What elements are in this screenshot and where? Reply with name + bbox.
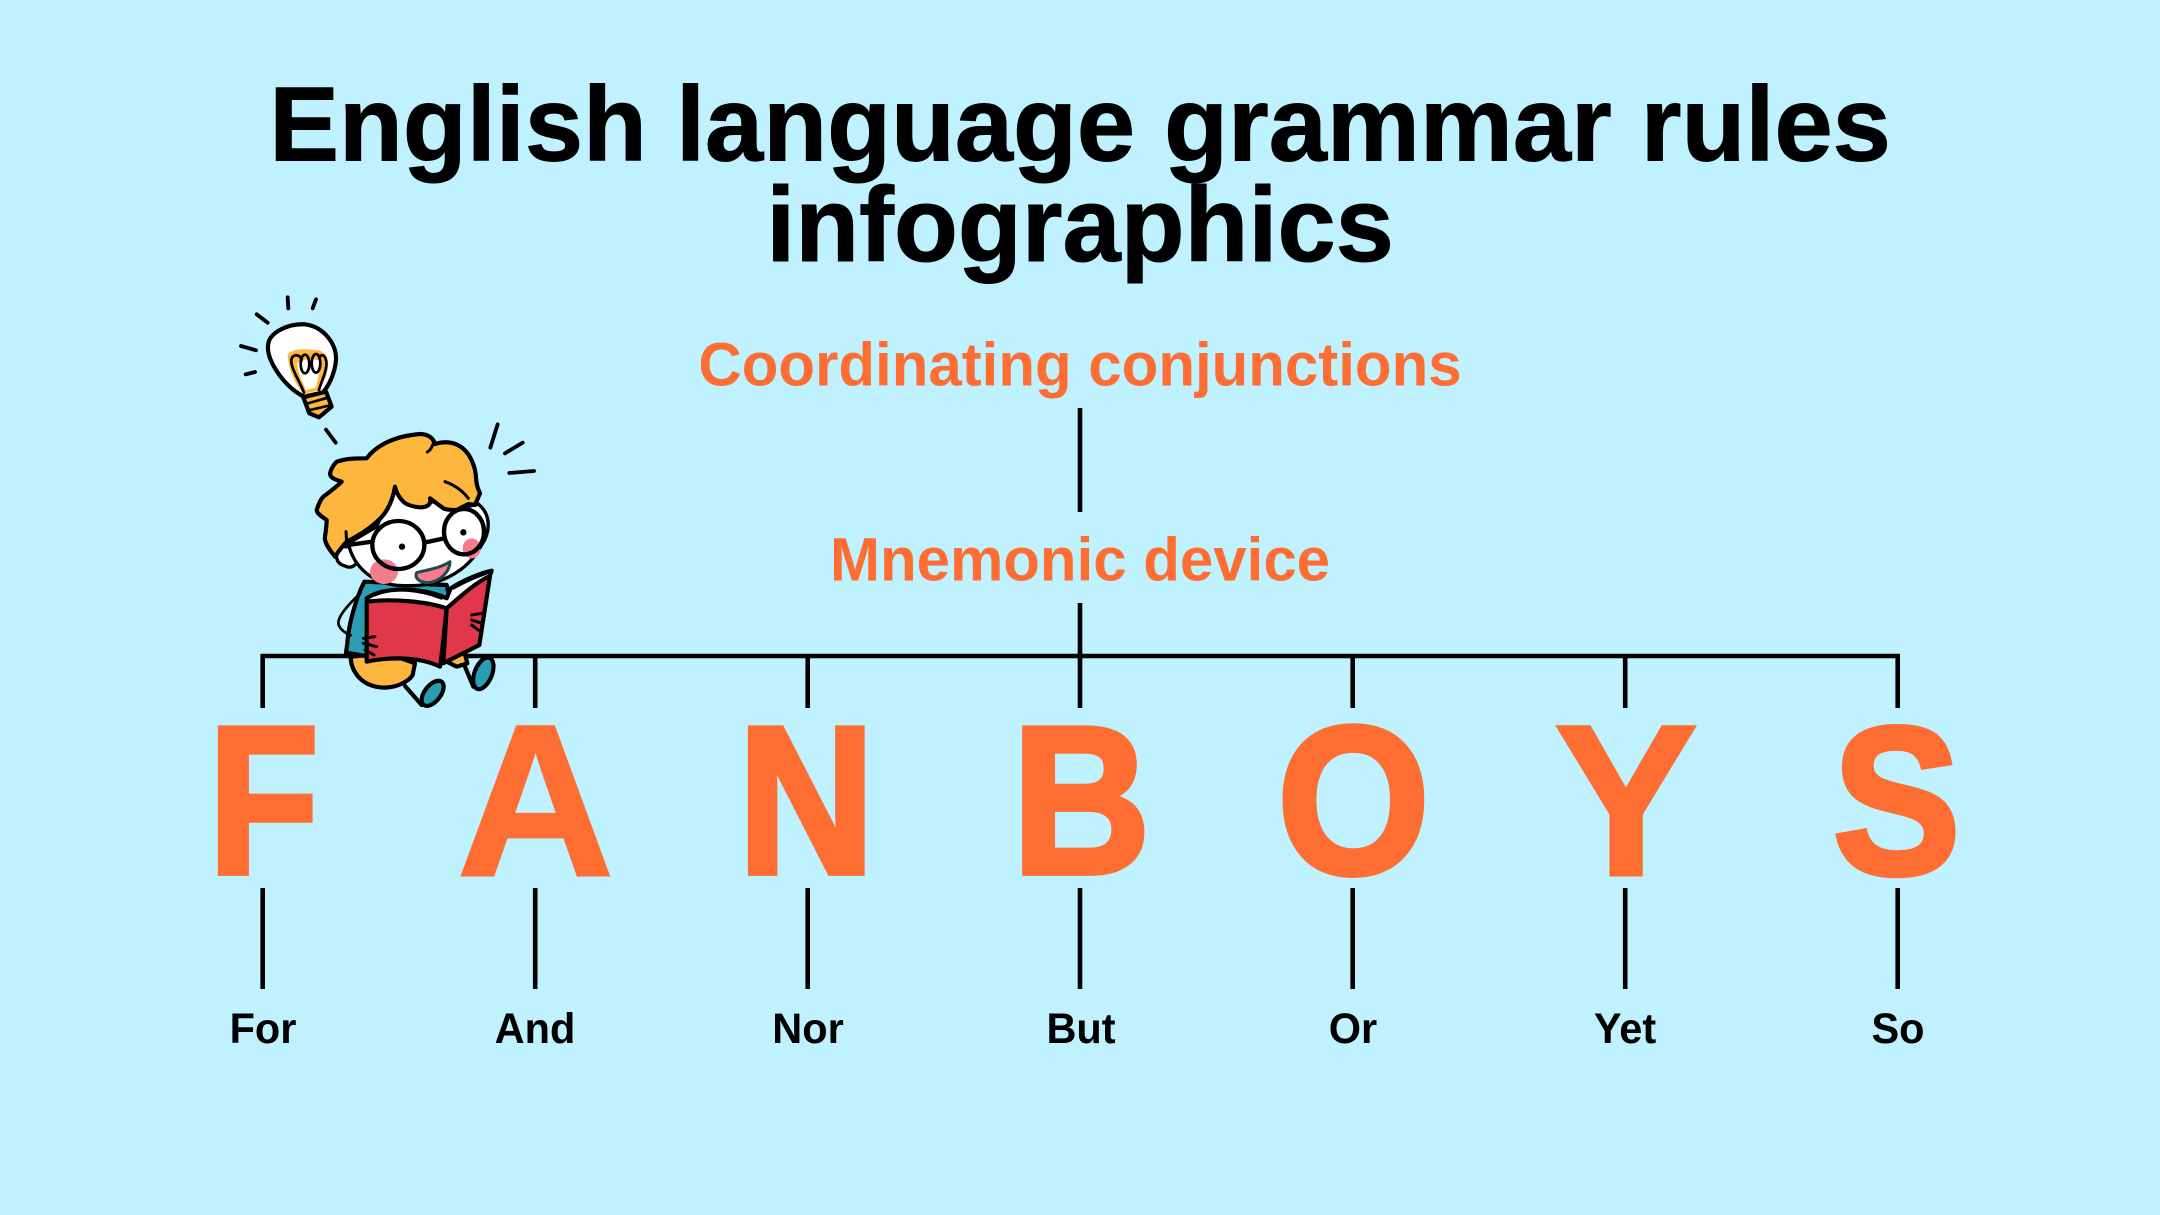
tree connector: mnemonic to letters	[263, 603, 1898, 708]
icon: idea rays	[241, 297, 534, 473]
FANBOYS letters: A	[456, 680, 615, 922]
heading: mnemonic device: Mnemonic device	[830, 525, 1330, 594]
FANBOYS letters: N	[738, 684, 875, 918]
FANBOYS letters: F	[208, 682, 319, 918]
illustration: child reading with light bulb	[241, 297, 534, 710]
conjunction words: Or	[1329, 1005, 1377, 1052]
FANBOYS letters: B	[1012, 683, 1150, 918]
conjunction words: And	[495, 1005, 575, 1052]
title	[269, 66, 1891, 284]
FANBOYS letters	[208, 680, 1961, 922]
character body	[338, 582, 450, 657]
character hair	[317, 434, 480, 557]
heading: coordinating conjunctions: Coordinating conjunctions	[698, 330, 1462, 399]
conjunction words: Yet	[1594, 1005, 1656, 1052]
open red book	[363, 571, 492, 667]
conjunction words: For	[230, 1005, 296, 1052]
conjunction words	[230, 1005, 1925, 1052]
icon: light bulb	[268, 324, 336, 417]
character glasses	[348, 504, 488, 569]
conjunction words: But	[1046, 1005, 1116, 1052]
character face	[337, 487, 488, 586]
FANBOYS letters: O	[1277, 684, 1430, 919]
conjunction words: So	[1871, 1005, 1925, 1052]
FANBOYS letters: Y	[1553, 680, 1699, 922]
title: infographics	[766, 166, 1394, 284]
connector: heading to mnemonic	[1078, 408, 1082, 512]
title: English language grammar rules	[269, 66, 1891, 184]
FANBOYS letters: S	[1833, 683, 1961, 918]
conjunction words: Nor	[772, 1005, 844, 1052]
character legs	[351, 647, 498, 710]
connectors: letters to words	[263, 888, 1898, 989]
